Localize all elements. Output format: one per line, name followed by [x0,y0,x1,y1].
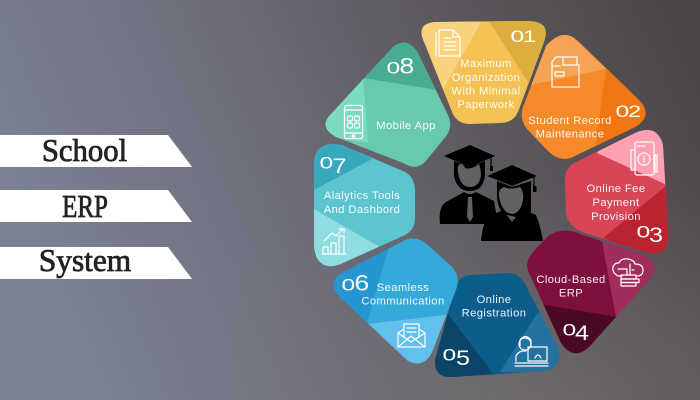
number: 7 [332,154,347,178]
icon: folder [552,57,579,87]
number: 3 [649,223,663,247]
label: Paperwork [457,99,515,111]
ribbon: ERP [0,189,192,225]
ribbon: School [0,132,192,168]
icon: growth chart [322,229,346,254]
icon: graduates [440,145,543,241]
number: 5 [456,346,470,370]
number [342,271,369,296]
panel: 08 mobile app [326,42,450,167]
panel: 04 cloud-based ERP [527,230,654,354]
label: Communication [361,295,445,307]
label: Registration [462,307,526,319]
icon: document [436,30,460,56]
label: With Minimal [451,86,521,98]
label: Seamless [377,282,429,294]
panel: 03 online fee payment [565,130,668,254]
number: 0 [320,154,333,173]
icon: phone payment [631,142,657,175]
icon: envelope [398,324,425,347]
female graduate [481,165,543,241]
label: Payment [592,197,640,209]
number [320,154,347,178]
label: Provision [591,211,641,223]
number [442,346,470,370]
label: ERP [559,287,583,299]
label: And Dashbord [324,204,400,216]
label: Organization [452,72,520,84]
number: 0 [442,346,456,365]
label: Cloud-Based [536,274,606,286]
icon: person at computer [515,336,548,366]
number: 0 [342,276,355,295]
number: 2 [628,102,641,121]
number [562,321,589,345]
number: 0 [562,321,576,340]
label: Online [477,294,511,306]
panel: 06 seamless communication [334,238,458,364]
label: Online Fee [587,183,645,195]
number: 0 [636,223,650,242]
number [386,54,414,79]
ribbon: System [0,243,192,279]
label: Maintenance [536,129,604,141]
number: 0 [510,28,524,46]
label: Student Record [528,115,612,127]
panel: 02 student record [522,35,646,159]
number [616,102,641,121]
label: Alalytics Tools [324,190,400,202]
number: 6 [354,271,369,296]
number: 4 [575,321,589,345]
number: 1 [523,27,536,46]
label: Maximum [460,58,512,70]
ribbon: ERP: ERP [62,189,108,225]
panel: 07 analytics tools [314,144,415,266]
number: 8 [400,54,414,79]
ribbon: School: School [42,132,127,168]
panel: 01 maximum organization [422,21,546,124]
number: 0 [386,59,400,78]
panel: 05 online registration [434,273,559,377]
icon: cloud [613,259,643,286]
male graduate [440,145,498,224]
number [636,223,663,247]
icon: phone [344,106,362,138]
number: 0 [616,103,629,121]
number [510,27,536,46]
ribbon: System: System [39,243,132,278]
label: Mobile App [376,120,436,132]
